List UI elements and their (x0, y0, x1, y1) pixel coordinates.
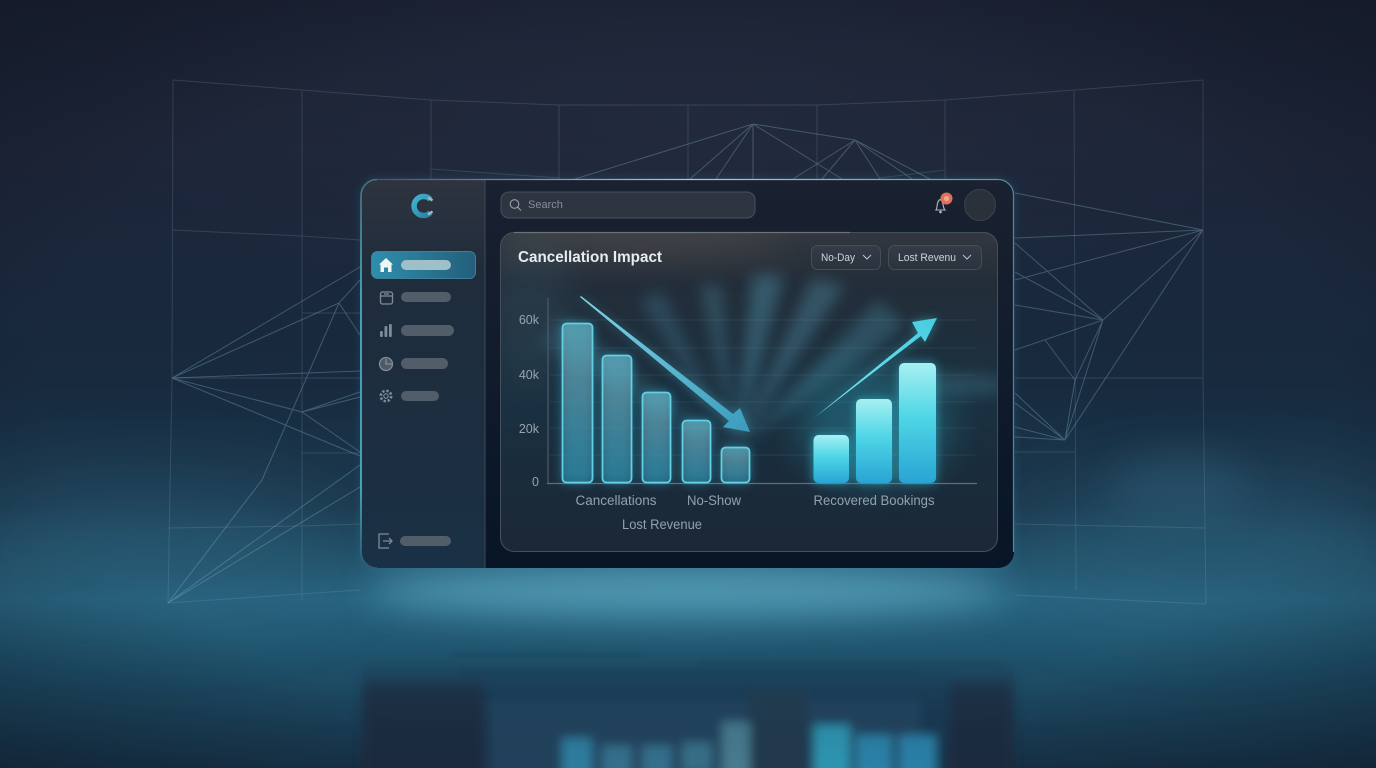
nav item: reports (380, 358, 448, 370)
search bar: Search (528, 199, 563, 211)
logo (414, 196, 432, 216)
dashboard window (361, 179, 1014, 568)
dropdown: metric: Lost Revenu (898, 252, 956, 264)
chart: cancellation impact bars (519, 296, 977, 532)
main area background (361, 179, 1014, 568)
x axis labels: No-Show (687, 493, 741, 508)
x axis labels: Cancellations (576, 493, 657, 508)
x axis labels (576, 493, 935, 532)
nav item: calendar (380, 292, 451, 304)
lost revenue bars (562, 323, 750, 483)
recovered bookings bars (813, 363, 936, 483)
y axis labels: 20k (519, 422, 540, 436)
icon: pie chart (380, 358, 392, 370)
wireframe backdrop (168, 80, 1206, 604)
notification bell (936, 192, 952, 213)
y axis labels: 0 (532, 475, 539, 489)
fog: left and right mist with floor glow (0, 454, 1376, 616)
nav item: home active (372, 252, 476, 278)
icon: calendar (380, 292, 392, 304)
nav item: charts (380, 324, 454, 337)
panel title: Cancellation Impact (518, 249, 663, 266)
x axis labels: Recovered Bookings (814, 493, 935, 508)
icon: home (379, 258, 393, 272)
icon: search (510, 200, 521, 210)
dropdown: metric (888, 246, 982, 270)
y axis labels: 60k (519, 313, 540, 327)
light rays (490, 214, 1010, 485)
sidebar (361, 179, 485, 568)
window glow (361, 179, 1014, 568)
y axis labels: 40k (519, 368, 540, 382)
dropdown: period (812, 246, 880, 270)
badge (940, 192, 952, 204)
water floor with reflection of the dashboard (362, 660, 1014, 768)
x axis labels: Lost Revenue (622, 517, 702, 532)
avatar (964, 190, 996, 220)
water ripples (450, 655, 1000, 672)
y axis labels (519, 313, 540, 489)
icon: bars (380, 324, 392, 337)
dropdown: period: No-Day (821, 252, 855, 264)
search bar (501, 192, 755, 218)
arrow: rising recovery (814, 318, 937, 418)
chart panel (490, 214, 1010, 552)
icon: gear (381, 391, 391, 401)
nav item: sign out (379, 534, 451, 548)
arrow: falling revenue (580, 296, 750, 432)
icon: exit (379, 534, 392, 548)
window edges (361, 180, 377, 568)
nav item: settings (381, 391, 439, 401)
